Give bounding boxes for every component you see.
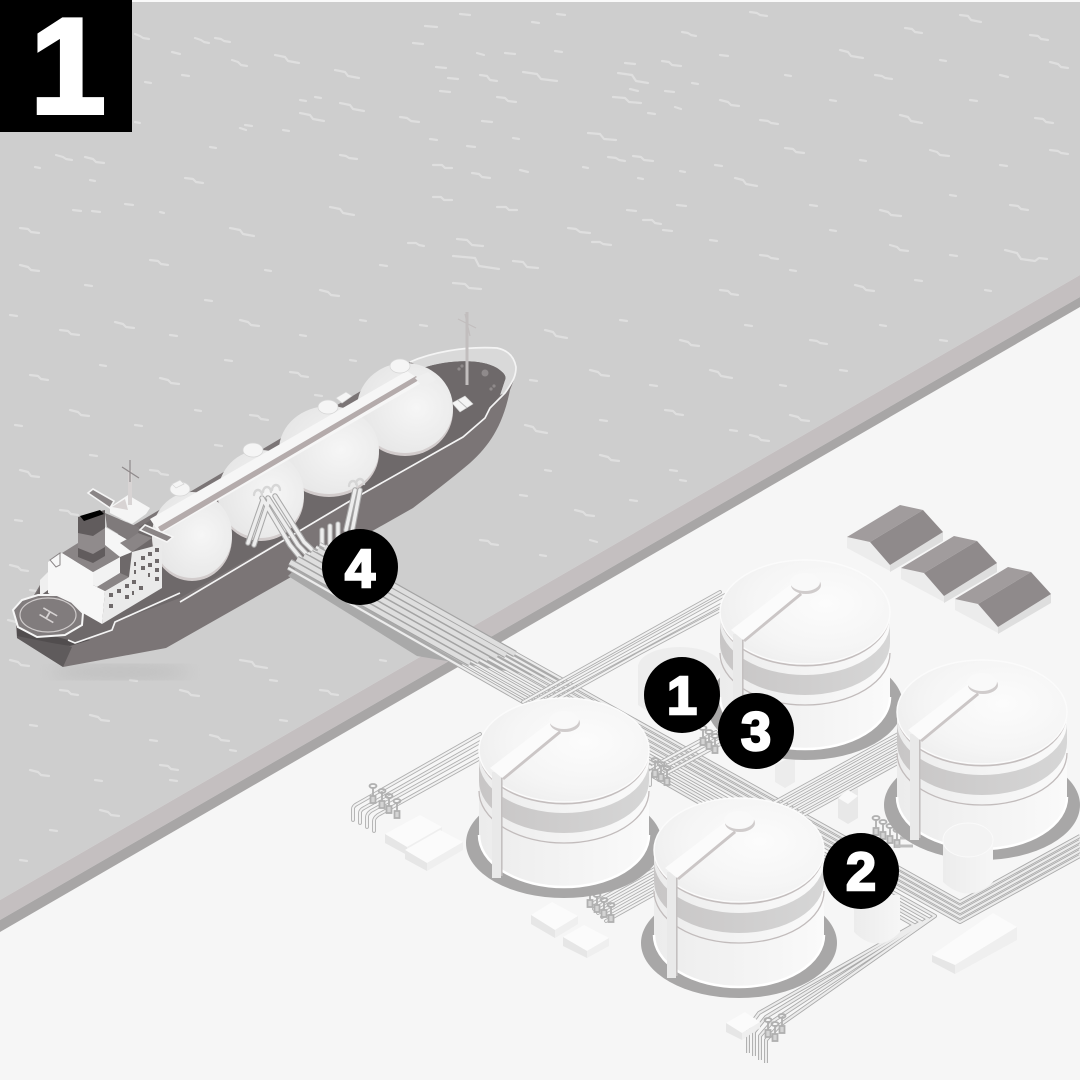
waves (8, 12, 1068, 861)
bow mast (458, 312, 476, 385)
right bridge wing (140, 525, 173, 542)
lower ledge (97, 573, 129, 591)
cargo dome 1 (152, 492, 232, 581)
marker 2 (823, 833, 899, 909)
marker 3 (718, 693, 794, 769)
loading arms (248, 479, 364, 571)
valves: bottom group (764, 1014, 786, 1041)
bow equipment (415, 364, 496, 412)
marker 4 (322, 529, 398, 605)
valves: central groups (652, 726, 718, 785)
top white strip (132, 0, 1080, 2)
marker 3: 3 (741, 702, 771, 762)
cylinder east (943, 823, 993, 894)
step right wall (93, 557, 120, 587)
funnel deck (62, 543, 120, 572)
warehouses (847, 505, 1051, 634)
valves: east group (872, 816, 918, 847)
cargo dome 3 (279, 406, 379, 497)
superstructure (40, 489, 173, 624)
ship shadow (50, 665, 190, 679)
hull (16, 348, 516, 667)
tower side wall (102, 544, 162, 624)
stern faces (17, 628, 72, 667)
quay edge (0, 275, 1080, 932)
aft white corner (40, 572, 48, 596)
left bridge wing (88, 489, 114, 508)
bow bulwark (410, 348, 516, 395)
tank 2 east (884, 660, 1080, 860)
small tank behind marker 1 (638, 647, 722, 720)
LNG carrier ship (13, 312, 516, 667)
deck (18, 361, 506, 643)
windows (109, 548, 159, 608)
wall below bridge (105, 527, 132, 557)
utility boxes (775, 755, 858, 824)
dome caps (170, 359, 410, 496)
tank 3 west (466, 698, 662, 898)
jetty strip (288, 545, 560, 680)
cylinder south (854, 895, 900, 944)
valves: west group (370, 784, 400, 818)
cargo dome 4 (357, 363, 453, 456)
valves: south group (586, 888, 614, 922)
concrete blocks (385, 815, 1017, 1040)
bridge base shadow (105, 513, 140, 540)
section number badge (0, 0, 132, 142)
tank 1 north (707, 560, 903, 760)
pipe network (288, 544, 1080, 1063)
deck white edge (68, 348, 516, 643)
stern mast (122, 460, 139, 505)
helipad: H (35, 604, 63, 627)
marker 2: 2 (846, 842, 876, 902)
main left wall (48, 553, 105, 624)
marker 4: 4 (345, 539, 375, 599)
marker 1 (644, 657, 720, 733)
helipad (13, 595, 83, 637)
marker 1: 1 (667, 666, 697, 726)
funnel (78, 510, 105, 563)
tower roof (120, 533, 152, 552)
bridge (110, 495, 150, 524)
tank 4 south (641, 798, 837, 998)
cargo dome 2 (218, 450, 304, 541)
catwalk (150, 371, 423, 534)
